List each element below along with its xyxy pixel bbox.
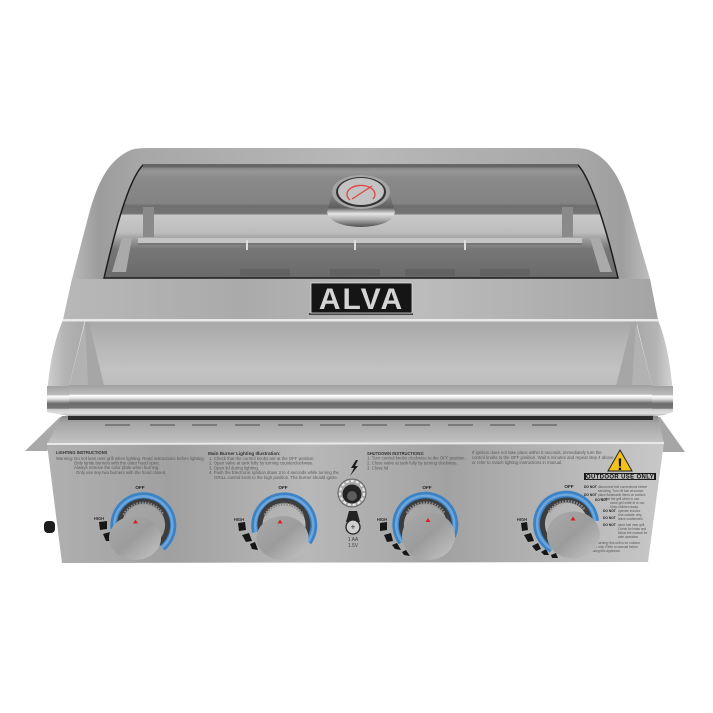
ignition button with bolt and battery	[338, 460, 366, 549]
front handle bar	[69, 385, 652, 416]
main burner lighting illustration: Main Burner Lighting Illustration:	[208, 451, 281, 456]
shutdown instructions: 2. Close valve at tank fully by turning clockwise.	[367, 460, 458, 466]
warnings list: Use outside only.	[618, 513, 642, 517]
knob 4: HIGH	[517, 517, 527, 522]
knob 2: HIGH	[234, 517, 244, 522]
ignition button with bolt and battery: 1 AA	[348, 537, 359, 543]
main burner lighting illustration	[208, 451, 340, 480]
warnings list: DO NOT	[603, 509, 616, 513]
warnings list: store fuel near grill.	[618, 523, 645, 527]
lighting instructions	[56, 450, 205, 475]
lighting instructions: Warning: Do not lean over grill when lighting. Read instructions before lighting.	[56, 456, 205, 461]
shutdown instructions: 1. Turn control knobs clockwise to the OFF position.	[367, 456, 466, 460]
knob 1	[94, 485, 172, 560]
right side flange	[650, 417, 685, 452]
warnings list: safe operation.	[618, 535, 639, 539]
knob 2: OFF	[278, 485, 288, 490]
bright reflections in corners	[112, 238, 132, 272]
main burner lighting illustration: 3. Open lid during lighting.	[209, 466, 259, 470]
ignition note: control knobs to the OFF position. Wait 5 minutes and repeat step 4 above	[472, 455, 614, 460]
warnings list: DO NOT	[584, 485, 597, 489]
shutdown instructions	[367, 451, 466, 470]
lighting instructions: Only use any two burners with the hood closed.	[76, 470, 166, 475]
warnings list: follow the manual for	[618, 531, 648, 535]
lid lower band	[63, 279, 658, 320]
knob 4	[517, 484, 600, 558]
knob 3: OFF	[422, 485, 432, 490]
knob 3: HIGH	[377, 517, 387, 522]
ignition note: If ignition does not take place within 5 seconds, immediately turn the	[472, 450, 602, 455]
knob 2	[234, 485, 313, 560]
knob 3	[377, 485, 455, 560]
warnings list: servicing. Turn off fuel at source.	[598, 489, 644, 493]
shutdown instructions: 3. Close lid	[367, 466, 389, 470]
warnings list: move grill while lit or hot.	[610, 501, 645, 505]
warnings list: use only. Refer to manual before	[592, 545, 638, 549]
lid side caps	[47, 320, 673, 416]
warnings list: DO NOT	[595, 498, 608, 502]
warnings list: or near the grill when in use.	[600, 497, 640, 501]
ignition button with bolt and battery: 1.5V	[348, 543, 359, 549]
main burner lighting illustration: GRILL control knob to the high position. The burner should ignite.	[214, 475, 338, 480]
ignition note: or refer to match lighting instructions in manual.	[472, 460, 562, 465]
warnings list: DO NOT	[603, 523, 616, 527]
warnings list: disconnect fuel connections before	[598, 485, 647, 489]
lid edge highlight	[63, 319, 658, 322]
lighting instructions: Always remove the color plate when burning.	[74, 465, 160, 470]
lighting instructions: LIGHTING INSTRUCTIONS	[56, 450, 108, 455]
warnings list: DO NOT	[584, 493, 597, 497]
ignition button with bolt and battery: +	[351, 522, 356, 532]
ignition note	[472, 450, 614, 465]
knob 4: OFF	[564, 484, 574, 489]
lighting instructions: Only ignite burners with the outer hood open.	[74, 460, 160, 466]
temperature gauge	[327, 175, 395, 227]
knob 1: HIGH	[94, 516, 104, 521]
warnings list: operate indoors.	[618, 509, 641, 513]
warnings list: DO NOT	[603, 516, 616, 520]
drip tray with slots	[47, 416, 664, 444]
warnings list: using this appliance.	[592, 549, 621, 553]
lid body	[63, 148, 658, 320]
main burner lighting illustration: 4. Push the Electronic Ignition down 3 to 4 seconds while turning the	[209, 470, 340, 475]
warnings list: Warning: this unit is for outdoor	[596, 541, 641, 545]
shutdown instructions: SHUTDOWN INSTRUCTIONS:	[367, 451, 424, 456]
main burner lighting illustration: 2. Open valve at tank fully by turning counterclockwise.	[209, 460, 314, 466]
knob 1: OFF	[135, 485, 145, 490]
left side flange	[25, 417, 70, 451]
burner shadows	[240, 269, 530, 276]
warming shelf recess	[69, 321, 652, 386]
support posts	[143, 207, 154, 237]
warnings list: leave unattended.	[618, 517, 643, 521]
main burner lighting illustration: 1. Check that the control knobs are at the OFF position.	[209, 456, 315, 461]
warning triangle	[608, 450, 632, 474]
side connector	[44, 521, 55, 533]
grill	[25, 148, 685, 563]
glass window	[104, 165, 618, 278]
warnings list: Keep children away.	[610, 505, 639, 509]
ALVA logo plate: ALVA	[319, 283, 404, 316]
warnings list: place flammable items on surface	[598, 493, 646, 497]
warnings list: Check for leaks and	[618, 527, 646, 531]
control panel	[47, 442, 664, 563]
warnings list	[584, 485, 648, 553]
warning triangle: !	[617, 455, 623, 474]
outdoor use only label: OUTDOOR USE ONLY	[586, 474, 654, 480]
grill rack	[138, 238, 582, 250]
